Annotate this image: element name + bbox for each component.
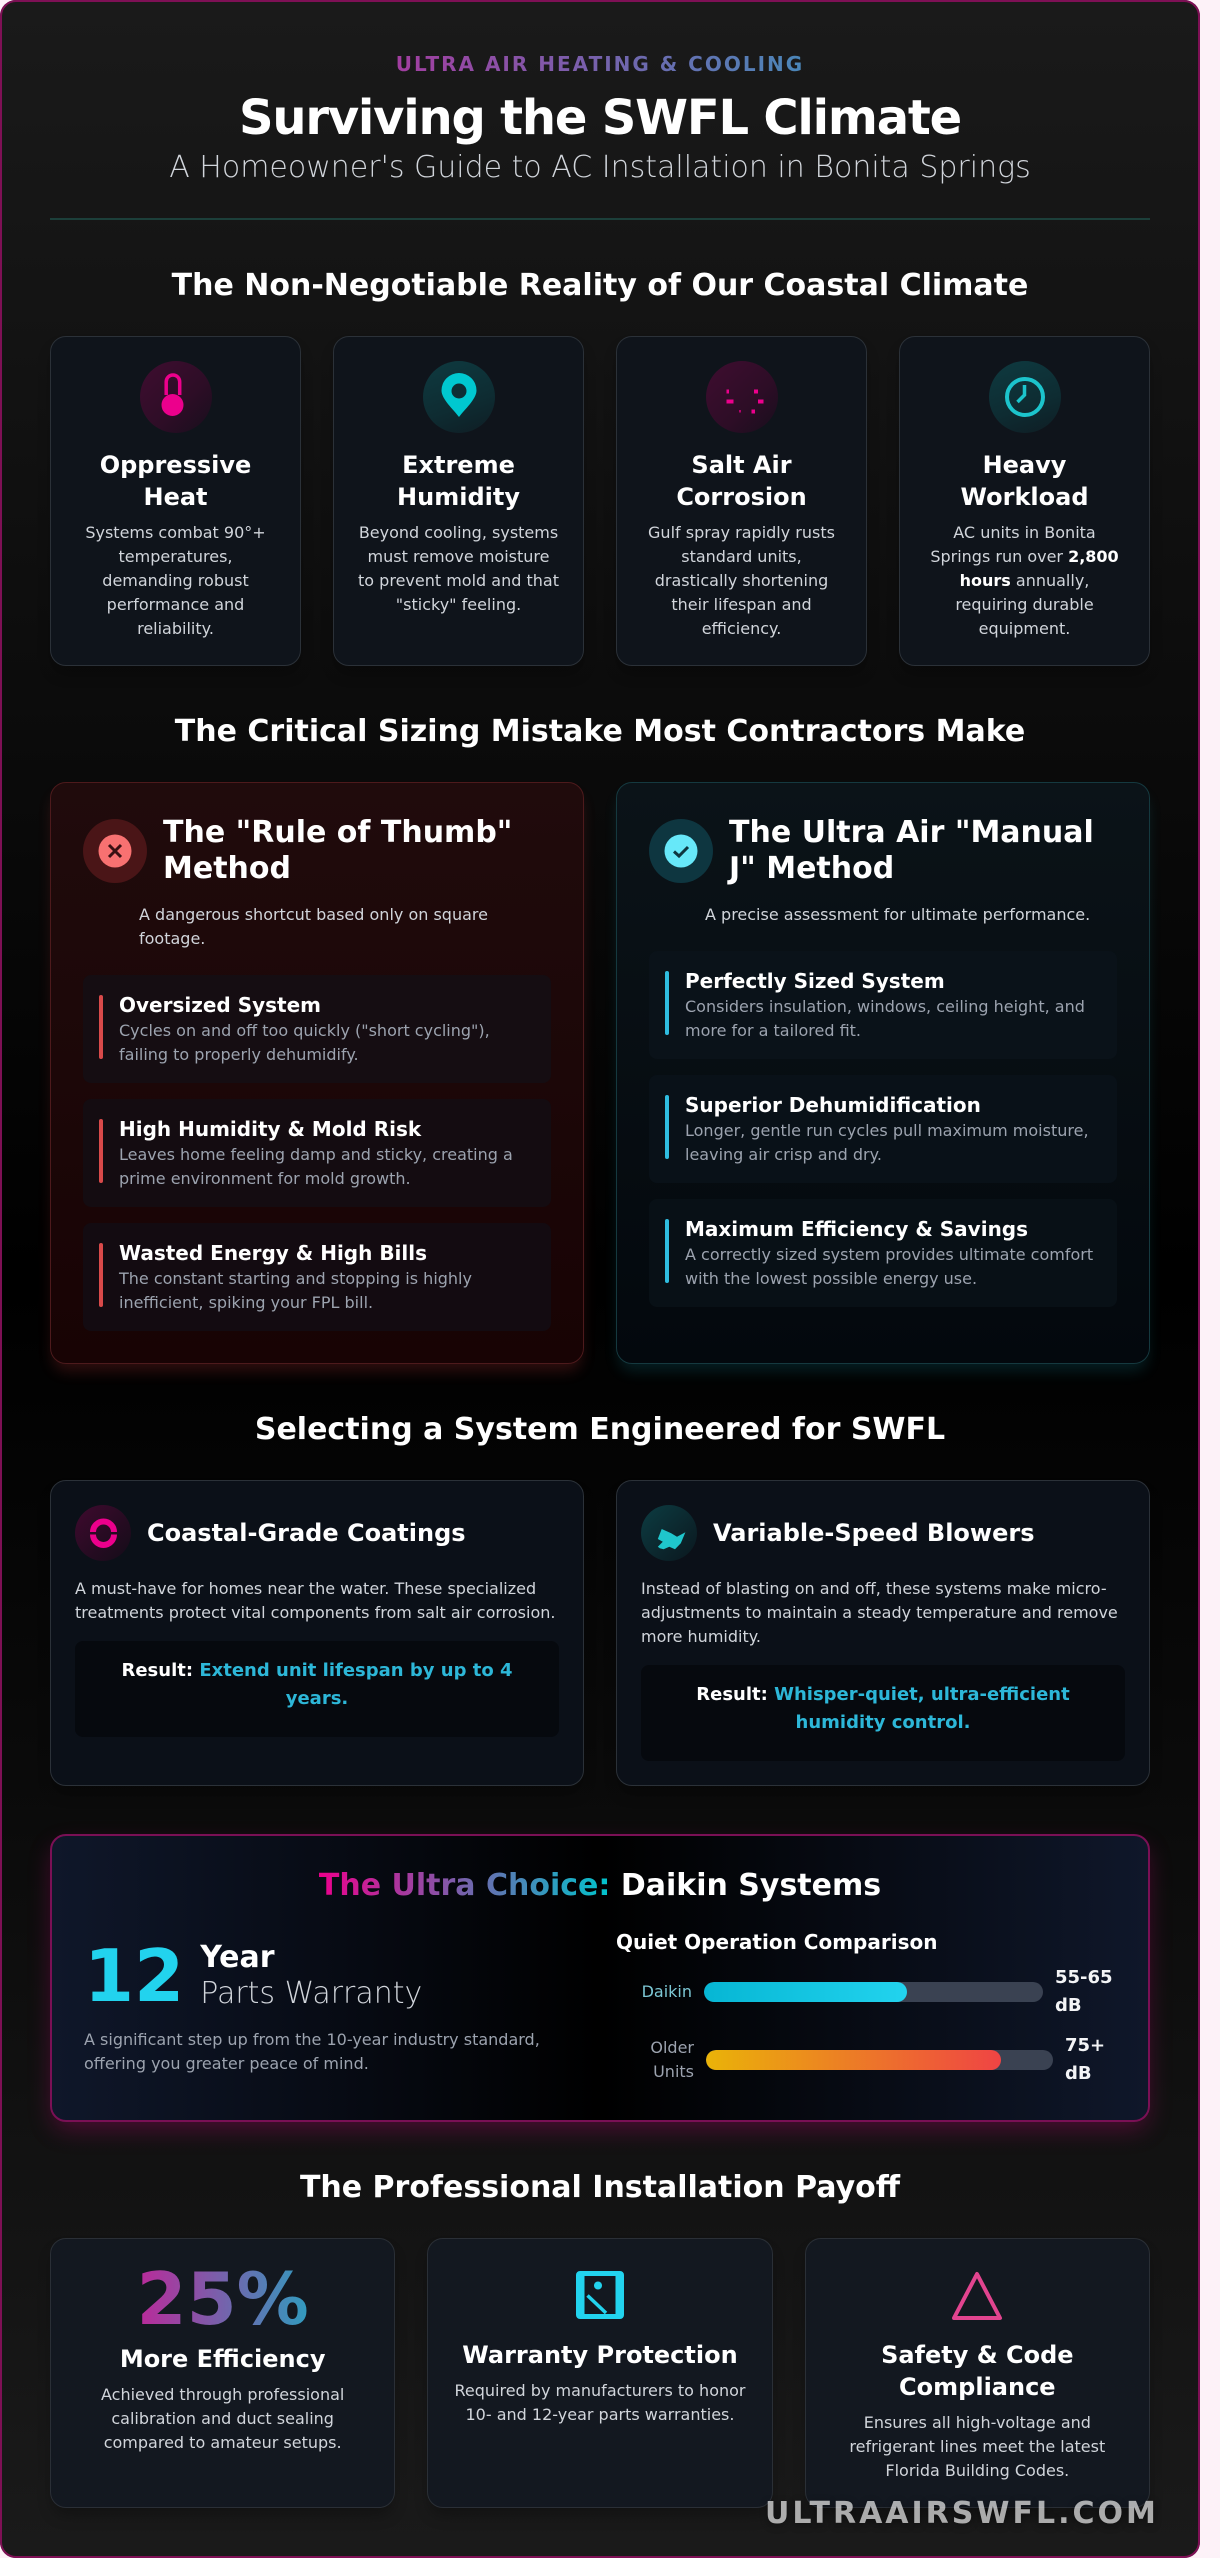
item: high humidity: Leaves home feeling damp and sticky, creating a: [119, 1145, 513, 1164]
method title: [727, 815, 1094, 886]
eyebrow brand label: ULTRA AIR HEATING & COOLING: [396, 52, 804, 76]
card text: [849, 2413, 1105, 2480]
item: wasted energy: The constant starting and stopping is highly: [119, 1269, 472, 1288]
card title: [960, 451, 1088, 511]
panel: extreme humidity: [333, 336, 584, 666]
stat: 25 percent: [75, 2263, 370, 2335]
card title: [676, 451, 807, 511]
method header: [649, 815, 1094, 886]
panel: manual j method: [616, 782, 1150, 1364]
card title: Extreme: [402, 451, 515, 479]
item: oversized system: failing to properly dehumidify.: [119, 1045, 359, 1064]
panel heading: The Ultra Choice: Daikin Systems: [319, 1868, 881, 1903]
item: perfectly sized: Perfectly Sized System: [685, 969, 945, 993]
method intro: A dangerous shortcut based only on square: [139, 905, 488, 924]
result callout: [75, 1641, 559, 1737]
website watermark: ULTRAAIRSWFL.COM: [765, 2496, 1159, 2531]
method title: The "Rule of Thumb": [163, 815, 512, 850]
feature header: [75, 1505, 466, 1561]
panel: safety and code compliance: [805, 2238, 1150, 2508]
panel: rule of thumb method: [50, 782, 584, 1364]
item: efficiency: Maximum Efficiency & Savings: [685, 1217, 1028, 1241]
card text: Florida Building Codes.: [885, 2461, 1069, 2480]
card text: performance and: [107, 595, 244, 614]
panel: daikin systems: [50, 1834, 1150, 2122]
feature text: [641, 1579, 1118, 1646]
bar row: older units: 75+: [1065, 2035, 1105, 2056]
card text: AC units in Bonita: [953, 523, 1096, 542]
card text: Beyond cooling, systems: [359, 523, 558, 542]
chart title: Quiet Operation Comparison: [616, 1930, 937, 1954]
card text: standard units,: [681, 547, 802, 566]
card text: temperatures,: [118, 547, 232, 566]
icon: warranty document: [576, 2271, 624, 2319]
card text: Gulf spray rapidly rusts: [648, 523, 835, 542]
icon: warning triangle: [952, 2272, 1002, 2320]
card title: Corrosion: [676, 483, 807, 511]
item: oversized system: [83, 975, 551, 1083]
item: perfectly sized: Considers insulation, windows, ceiling height, and: [685, 997, 1085, 1016]
card title: Heavy: [983, 451, 1066, 479]
panel: warranty protection: [427, 2238, 773, 2508]
card text: efficiency.: [702, 619, 781, 638]
warranty text: A significant step up from the 10-year industry standard,: [84, 2030, 540, 2049]
card text: [930, 523, 1119, 638]
card text: [648, 523, 835, 638]
method title: [163, 815, 512, 886]
card text: demanding robust: [102, 571, 249, 590]
item: dehumidification: Longer, gentle run cycles pull maximum moisture,: [685, 1121, 1089, 1140]
method title: Method: [163, 851, 291, 886]
method intro: footage.: [139, 929, 205, 948]
feature title: Coastal-Grade Coatings: [147, 1519, 466, 1547]
item: oversized system: Oversized System: [119, 993, 321, 1017]
card text: Springs run over 2,800: [930, 547, 1119, 566]
feature title: Variable-Speed Blowers: [713, 1519, 1034, 1547]
icon: blower: [641, 1505, 697, 1561]
card text: [101, 2385, 344, 2452]
card text: must remove moisture: [368, 547, 549, 566]
card text: Achieved through professional: [101, 2385, 344, 2404]
feature text: Instead of blasting on and off, these systems make micro-: [641, 1579, 1107, 1598]
warranty text: offering you greater peace of mind.: [84, 2054, 369, 2073]
card text: [358, 523, 559, 614]
panel: salt air corrosion: [616, 336, 867, 666]
bar row: daikin: [642, 1967, 1113, 2016]
card text: Ensures all high-voltage and: [864, 2413, 1091, 2432]
card title: Oppressive: [100, 451, 251, 479]
card title: [397, 451, 520, 511]
bar row: daikin: dB: [1055, 1995, 1082, 2016]
card title: Compliance: [899, 2373, 1056, 2401]
panel: heavy workload: [899, 336, 1150, 666]
method header: [83, 815, 512, 886]
icon: sync ring: [75, 1505, 131, 1561]
card text: reliability.: [137, 619, 214, 638]
heading: sizing mistake: The Critical Sizing Mistake Most Contractors Make: [175, 714, 1025, 749]
result callout: Result: Extend unit lifespan by up to 4: [121, 1660, 512, 1681]
chart: quiet operation comparison: [616, 1930, 1113, 2084]
icon: salt specks: [706, 361, 778, 433]
item: high humidity: prime environment for mold growth.: [119, 1169, 411, 1188]
icon: red x: [83, 819, 147, 883]
card title: Safety & Code: [881, 2341, 1074, 2369]
warranty number and label: Parts Warranty: [200, 1976, 422, 2011]
card text: "sticky" feeling.: [396, 595, 521, 614]
icon: thermometer: [140, 361, 212, 433]
header: [169, 52, 1031, 185]
item: high humidity: High Humidity & Mold Risk: [119, 1117, 421, 1141]
card text: compared to amateur setups.: [104, 2433, 342, 2452]
card text: refrigerant lines meet the latest: [849, 2437, 1105, 2456]
card text: to prevent mold and that: [358, 571, 559, 590]
item: efficiency: with the lowest possible energy use.: [685, 1269, 977, 1288]
card title: Workload: [960, 483, 1088, 511]
item: wasted energy: inefficient, spiking your FPL bill.: [119, 1293, 373, 1312]
stat: 25 percent: 25%: [136, 2257, 309, 2341]
icon: clock: [988, 361, 1060, 433]
card title: [100, 451, 251, 511]
bar row: older units: Units: [653, 2062, 694, 2081]
card title: Humidity: [397, 483, 520, 511]
card text: their lifespan and: [671, 595, 812, 614]
panel: more efficiency: [50, 2238, 395, 2508]
result callout: Result: Whisper-quiet, ultra-efficient: [696, 1684, 1070, 1705]
warranty number and label: 12: [84, 1934, 184, 2018]
feature text: treatments protect vital components from salt air corrosion.: [75, 1603, 555, 1622]
card title: Heat: [143, 483, 208, 511]
item: efficiency: A correctly sized system provides ultimate comfort: [685, 1245, 1093, 1264]
card text: equipment.: [979, 619, 1070, 638]
card title: Salt Air: [691, 451, 792, 479]
method title: The Ultra Air "Manual: [729, 815, 1094, 850]
feature text: more humidity.: [641, 1627, 761, 1646]
icon: location pin: [422, 361, 494, 433]
warranty text: [84, 2030, 540, 2073]
item: efficiency: [649, 1199, 1117, 1307]
warranty number and label: [84, 1934, 422, 2018]
card text: drastically shortening: [655, 571, 828, 590]
warranty number and label: Year: [200, 1940, 275, 1975]
panel: oppressive heat: [50, 336, 301, 666]
result callout: [641, 1665, 1125, 1761]
bar row: older units: Older: [650, 2038, 694, 2057]
panel: variable-speed blowers: [616, 1480, 1150, 1786]
bar row: older units: [650, 2035, 1105, 2084]
item: high humidity: [83, 1099, 551, 1207]
feature header: [641, 1505, 1034, 1561]
method intro: [139, 905, 488, 948]
item: wasted energy: Wasted Energy & High Bills: [119, 1241, 427, 1265]
item: perfectly sized: [649, 951, 1117, 1059]
item: dehumidification: [649, 1075, 1117, 1183]
bar row: daikin: 55-65: [1055, 1967, 1113, 1988]
card text: calibration and duct sealing: [111, 2409, 334, 2428]
item: oversized system: Cycles on and off too quickly ("short cycling"),: [119, 1021, 490, 1040]
card text: Required by manufacturers to honor: [454, 2381, 745, 2400]
feature text: [75, 1579, 555, 1622]
card title: [881, 2341, 1074, 2401]
card text: hours annually,: [960, 571, 1089, 590]
warranty stat: [84, 1934, 540, 2073]
feature text: adjustments to maintain a steady temperature and remove: [641, 1603, 1118, 1622]
card text: 10- and 12-year parts warranties.: [466, 2405, 734, 2424]
card text: [454, 2381, 746, 2424]
bar row: older units: dB: [1065, 2063, 1092, 2084]
card text: [85, 523, 266, 638]
icon: cyan check: [649, 819, 713, 883]
feature text: A must-have for homes near the water. These specialized: [75, 1579, 536, 1598]
method intro: A precise assessment for ultimate performance.: [705, 905, 1090, 924]
card title: Warranty Protection: [462, 2341, 738, 2369]
panel: coastal-grade coatings: [50, 1480, 584, 1786]
card text: Systems combat 90°+: [85, 523, 266, 542]
result callout: years.: [286, 1688, 348, 1709]
heading: selecting a system: Selecting a System Engineered for SWFL: [255, 1412, 945, 1447]
item: wasted energy: [83, 1223, 551, 1331]
heading: coastal climate: The Non-Negotiable Reality of Our Coastal Climate: [172, 268, 1028, 303]
card text: requiring durable: [955, 595, 1094, 614]
method title: J" Method: [729, 851, 894, 886]
result callout: humidity control.: [796, 1712, 970, 1733]
heading: installation payoff: The Professional Installation Payoff: [300, 2170, 900, 2205]
item: dehumidification: Superior Dehumidification: [685, 1093, 981, 1117]
eyebrow brand label: [50, 50, 1150, 78]
card title: More Efficiency: [120, 2345, 326, 2373]
item: perfectly sized: more for a tailored fit.: [685, 1021, 861, 1040]
subtitle: A Homeowner's Guide to AC Installation in Bonita Springs: [169, 150, 1031, 185]
bar row: daikin: Daikin: [642, 1982, 692, 2001]
item: dehumidification: leaving air crisp and dry.: [685, 1145, 882, 1164]
main title: Surviving the SWFL Climate: [239, 90, 961, 146]
